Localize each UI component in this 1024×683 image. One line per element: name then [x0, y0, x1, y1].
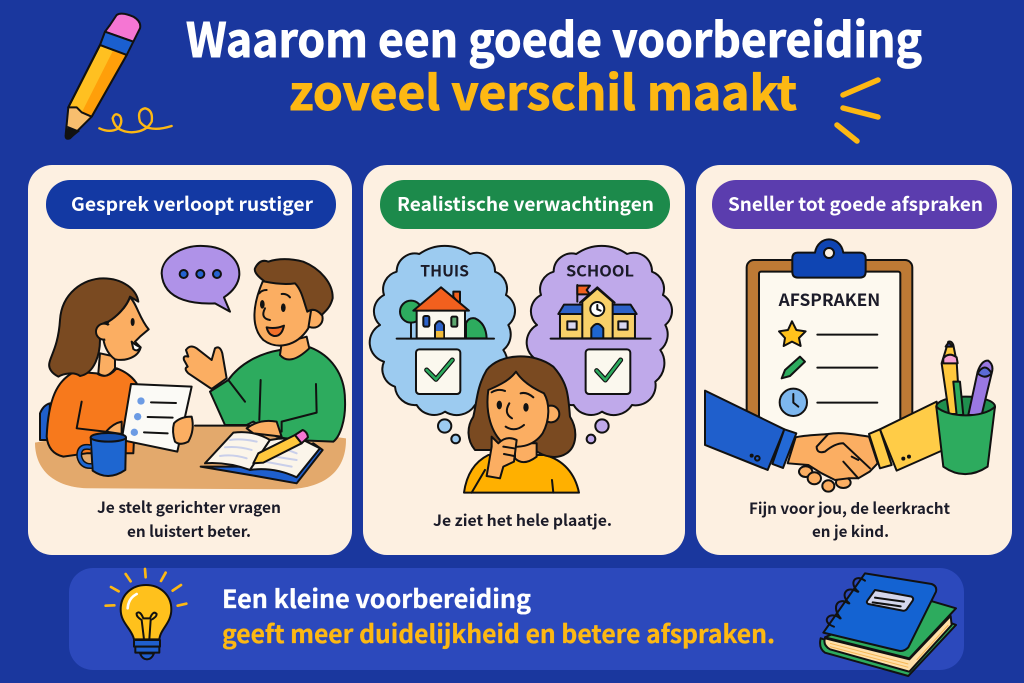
heading pill: gesprek — [46, 180, 336, 229]
caption: afspraken — [749, 497, 950, 542]
caption: gesprek — [97, 496, 281, 542]
panel: gesprek verloopt rustiger — [28, 165, 352, 555]
clipboard: AFSPRAKEN — [778, 287, 880, 311]
illustration: girl thinking about home and school — [370, 246, 672, 493]
bottom banner — [69, 568, 964, 676]
clipboard — [747, 239, 912, 447]
heading pill: verwachtingen: Realistische verwachtingen — [397, 190, 654, 217]
thought cloud: school: SCHOOL — [566, 259, 634, 281]
title: Waarom een goede voorbereiding — [186, 2, 922, 71]
heading pill: gesprek: Gesprek verloopt rustiger — [71, 190, 314, 217]
caption: afspraken: Fijn voor jou, de leerkracht — [749, 497, 950, 519]
text: conclusie: Een kleine voorbereiding — [222, 580, 531, 616]
caption: gesprek: Je stelt gerichter vragen — [97, 496, 281, 518]
caption: afspraken: en je kind. — [812, 520, 889, 542]
icon: light bulb — [106, 569, 186, 659]
heading pill: afspraken: Sneller tot goede afspraken — [728, 190, 983, 217]
handshake — [705, 391, 943, 492]
pencil cup — [936, 341, 995, 474]
icon: notebooks — [820, 573, 956, 676]
icon: sparks — [837, 80, 878, 141]
text: conclusie: geeft meer duidelijkheid en betere afspraken. — [222, 615, 775, 651]
title — [186, 2, 922, 124]
heading pill: afspraken — [712, 180, 997, 229]
caption: gesprek: en luistert beter. — [127, 520, 251, 542]
heading pill: verwachtingen — [380, 180, 670, 229]
thought cloud: school — [527, 246, 672, 443]
girl thinking — [464, 356, 579, 493]
illustration: clipboard, handshake and pencil cup — [705, 239, 995, 492]
icon: pencil with squiggle — [66, 14, 172, 139]
thought cloud: thuis: THUIS — [420, 259, 469, 281]
illustration: parent and teacher talking at a table — [35, 246, 346, 489]
panel: realistische verwachtingen — [363, 165, 685, 555]
text: conclusie — [222, 580, 775, 651]
panel: sneller tot goede afspraken — [696, 165, 1012, 555]
thought cloud: thuis — [370, 246, 515, 443]
title: zoveel verschil maakt — [289, 55, 797, 124]
caption: plaatje: Je ziet het hele plaatje. — [433, 509, 612, 531]
